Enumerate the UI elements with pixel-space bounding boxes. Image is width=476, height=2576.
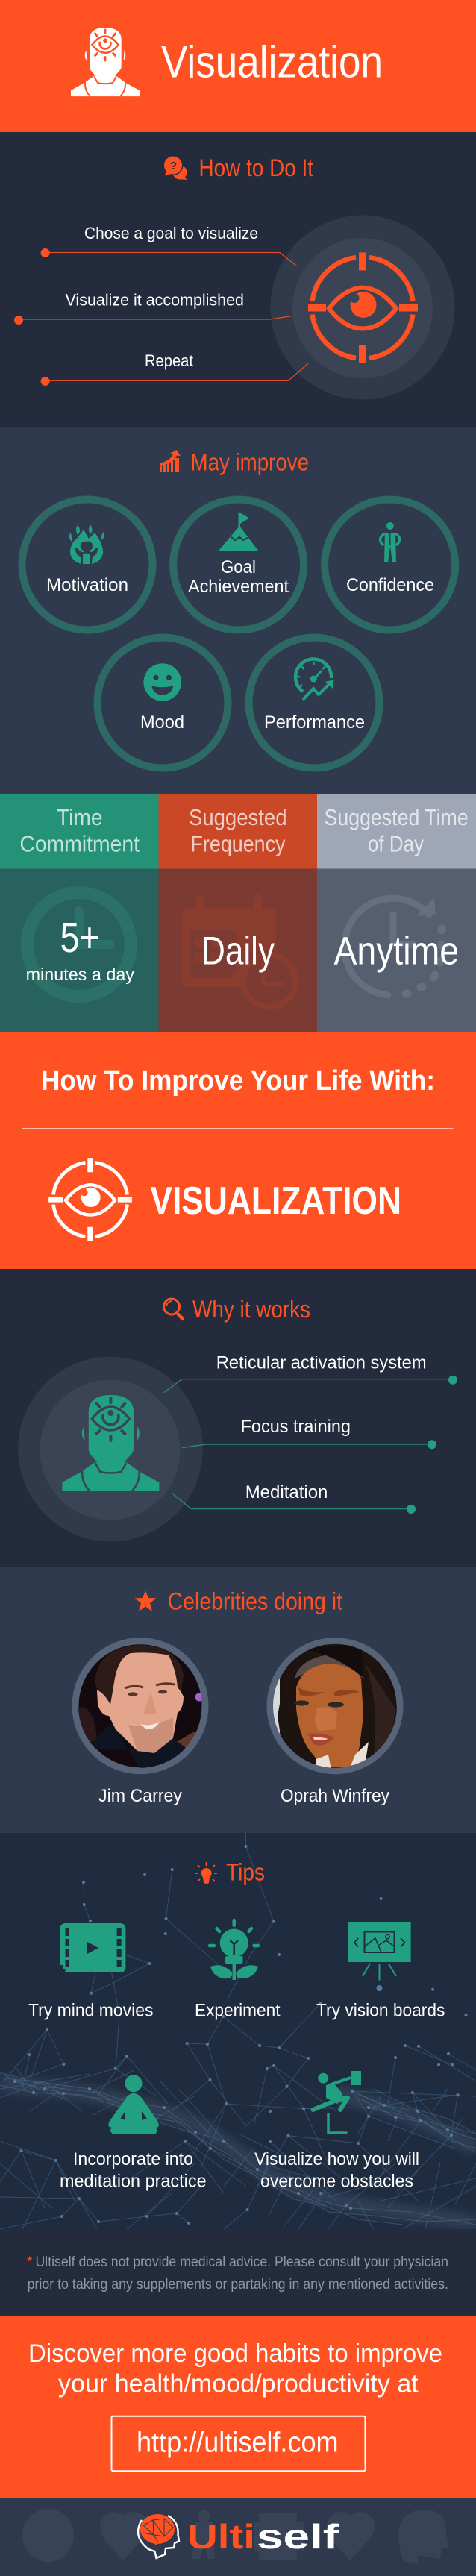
disclaimer text (27, 2254, 448, 2293)
faint clock arrow (345, 897, 442, 995)
value: daily: Daily (201, 930, 275, 974)
heading: suggested frequency: Frequency (191, 831, 286, 857)
text: health mood productivity: your health/mood/productivity at (58, 2370, 419, 2398)
icon: bulb plant (210, 1920, 258, 1980)
portrait: jim carrey (75, 1641, 205, 1774)
panel: how to do it (0, 132, 476, 427)
label: motivation: Motivation (46, 575, 128, 595)
label: incorporate into: Incorporate into (73, 2149, 193, 2169)
icon: growth chart (160, 450, 181, 472)
icon: white target eye (48, 1158, 132, 1241)
tip: try mind movies (28, 1923, 154, 2021)
faint clock (27, 892, 131, 997)
step: chose a goal (41, 224, 297, 266)
step: repeat: Repeat (145, 351, 193, 370)
heading: time commitment: Commitment (19, 831, 140, 857)
value: anytime: Anytime (334, 930, 459, 974)
heading: why it works: Why it works (192, 1296, 310, 1323)
step: repeat (41, 351, 308, 386)
icon: film strip (58, 1923, 125, 1974)
icon: speech bubbles question (163, 155, 187, 180)
icon: magnifier (164, 1299, 183, 1319)
panel: celebrities (0, 1567, 476, 1833)
step: visualize it accomplished (14, 291, 291, 325)
header banner (0, 0, 476, 132)
icon: light bulb (195, 1862, 217, 1884)
reason: meditation: Meditation (245, 1482, 328, 1502)
panel: why it works (0, 1269, 476, 1567)
item: mood (97, 637, 228, 768)
title: Visualization (161, 37, 383, 87)
heading: how to do it: How to Do It (198, 154, 313, 181)
heading: time commitment (19, 804, 140, 857)
tip: experiment (195, 1920, 281, 2021)
reason: reticular activation system (164, 1353, 457, 1393)
reason: meditation (172, 1482, 416, 1514)
logo: ultiself (138, 2514, 339, 2558)
faint background icons (22, 2509, 449, 2565)
heading: celebrities doing it: Celebrities doing it (168, 1588, 342, 1615)
heading: suggested frequency: Suggested (189, 804, 286, 830)
icon: gauge with arrow (295, 659, 334, 700)
label: overcome obstacles: overcome obstacles (260, 2172, 413, 2192)
label: experiment: Experiment (195, 2001, 281, 2021)
heading: how to improve your life with: How To Improve Your Life With: (41, 1065, 435, 1097)
heading: time commitment: Time (57, 804, 103, 830)
reason: reticular activation system: Reticular activation system (216, 1353, 427, 1373)
icon: person with third eye (71, 28, 140, 96)
icon: speech bubbles question: ? (170, 160, 177, 172)
tip: visualize overcoming obstacles (254, 2071, 419, 2192)
caption: jim carrey: Jim Carrey (98, 1786, 182, 1806)
button: ultiself url: http://ultiself.com (137, 2428, 339, 2459)
item: motivation (22, 500, 152, 630)
heading: tips: Tips (226, 1859, 265, 1886)
icon: runner with obstacle (313, 2071, 361, 2133)
item: goal achievement (173, 500, 304, 630)
tip: incorporate into meditation practice (60, 2075, 207, 2192)
reason: focus training: Focus training (241, 1417, 351, 1437)
panel: disclaimer (0, 2229, 476, 2316)
icon: star (134, 1591, 157, 1611)
icon: meditator (108, 2075, 159, 2134)
disclaimer text: prior to taking any supplements or partaking in any mentioned activities. (28, 2277, 448, 2293)
caption: oprah winfrey: Oprah Winfrey (281, 1786, 389, 1806)
text: discover more: Discover more good habits to improve (28, 2340, 442, 2368)
panel: call to action (0, 2316, 476, 2498)
reason: focus training (182, 1417, 436, 1449)
panel: suggested frequency (158, 794, 317, 1032)
label: achievement: Achievement (188, 577, 289, 597)
label: mood: Mood (140, 712, 184, 733)
wordmark: visualization: VISUALIZATION (150, 1179, 401, 1223)
label: try mind movies: Try mind movies (28, 2001, 154, 2021)
icon: target eye (308, 252, 418, 363)
disclaimer text: Ultiself does not provide medical advice. Please consult your physician (36, 2254, 448, 2270)
step: visualize it accomplished: Visualize it accomplished (66, 291, 244, 309)
icon: flame person (69, 524, 104, 564)
icon: person with third eye (62, 1395, 159, 1491)
heading: suggested time of day (324, 804, 469, 857)
logo text: self: self (257, 2517, 339, 2556)
icon: confident person (380, 522, 400, 562)
panel: tips (0, 1833, 476, 2229)
label: try vision boards: Try vision boards (316, 2001, 445, 2021)
logo text: ulti: Ulti (187, 2517, 255, 2556)
label: meditation practice: meditation practice (60, 2172, 207, 2192)
item: performance (249, 637, 379, 768)
heading: may improve: May improve (191, 449, 309, 476)
tip: try vision boards (316, 1922, 445, 2021)
icon: smiley (143, 663, 181, 701)
value label: minutes a day: minutes a day (26, 965, 134, 984)
icon: vision board (348, 1922, 411, 1981)
heading: suggested frequency (189, 804, 286, 857)
panel: may improve (0, 427, 476, 794)
logo icon: head with brain (138, 2514, 179, 2558)
step: chose a goal: Chose a goal to visualize (84, 224, 258, 242)
item: confidence (325, 500, 455, 630)
panel: suggested time of day (317, 794, 476, 1032)
disclaimer text: * (27, 2254, 33, 2270)
icon: mountain flag (219, 512, 258, 551)
heading: suggested time of day: of Day (368, 831, 424, 857)
panel: how to improve (0, 1032, 476, 1269)
label: goal: Goal (221, 557, 256, 577)
panel: footer (0, 2498, 476, 2576)
portrait: oprah winfrey (270, 1641, 400, 1772)
button: ultiself url (112, 2416, 366, 2471)
faint calendar clock (182, 897, 295, 1007)
panel: time commitment (0, 794, 158, 1032)
label: performance: Performance (264, 712, 365, 733)
background network pattern (0, 1833, 476, 2229)
value: 5+: 5+ (60, 914, 100, 962)
concentric circles (18, 1357, 203, 1541)
label: visualize how you will: Visualize how you will (254, 2149, 419, 2169)
concentric circles (270, 215, 455, 400)
label: confidence: Confidence (346, 575, 434, 595)
